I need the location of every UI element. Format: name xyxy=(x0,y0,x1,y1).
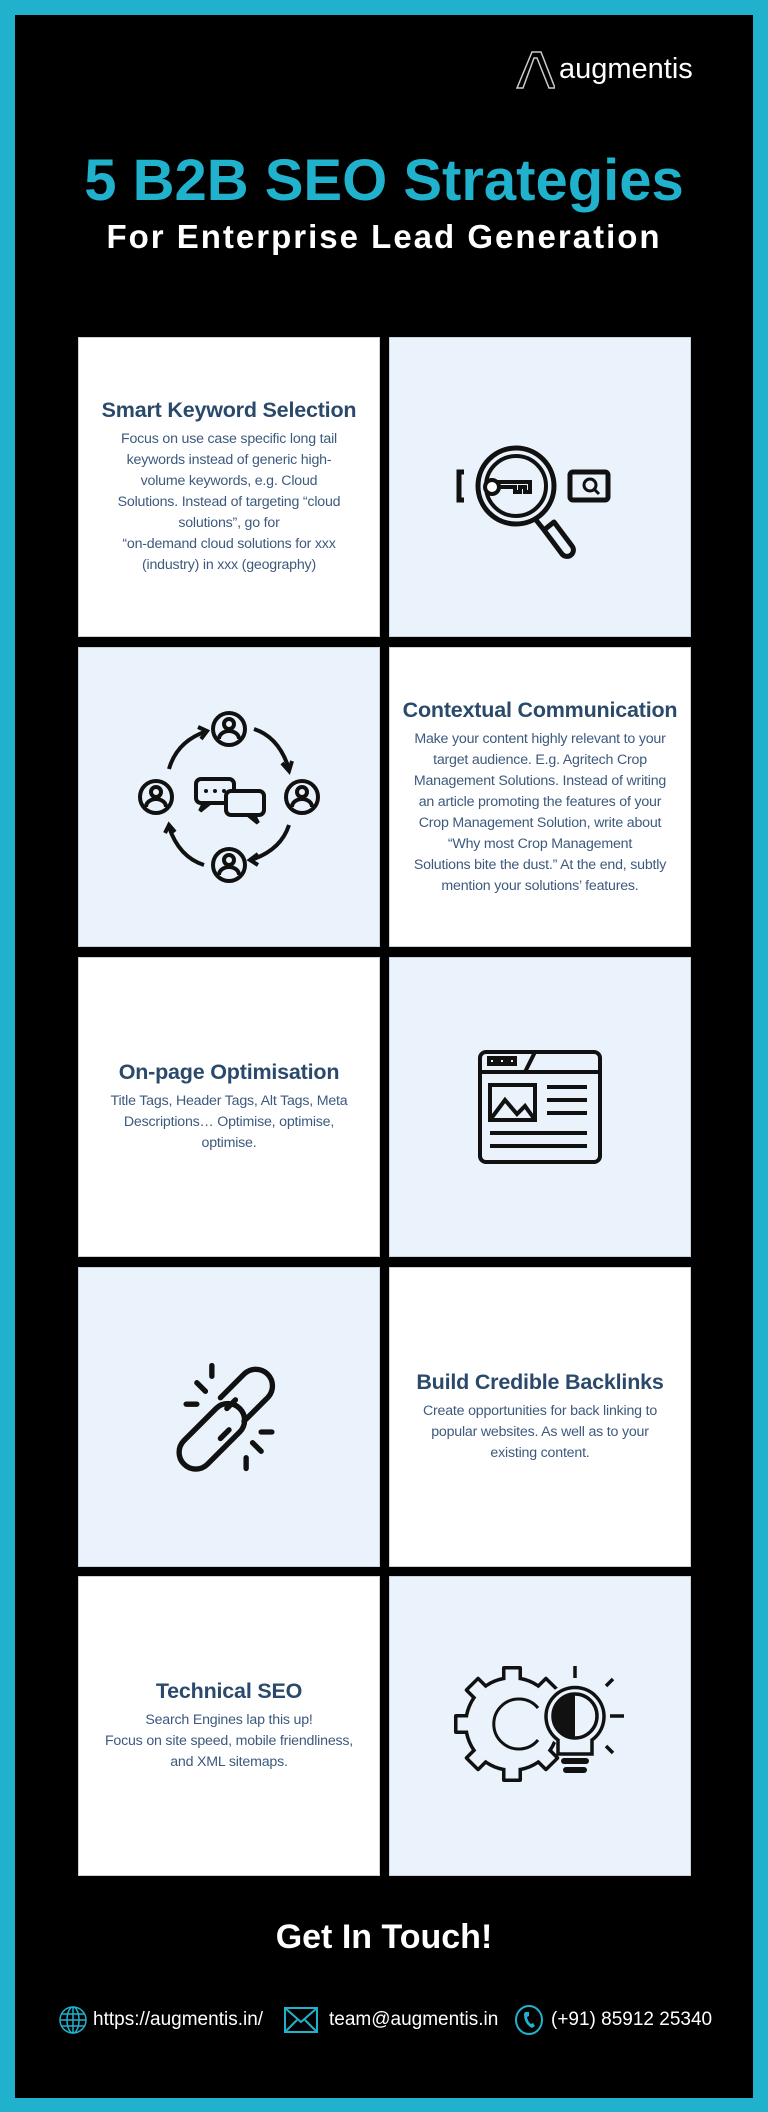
panel: smart keyword selection: solutions”, go for xyxy=(178,515,280,531)
contact: email xyxy=(284,2007,498,2033)
panel: contextual communication: Solutions bite the dust.” At the end, subtly xyxy=(414,856,666,872)
title: 5 B2B SEO Strategies xyxy=(84,148,684,213)
panel: technical seo: and XML sitemaps. xyxy=(170,1754,288,1770)
logo: augmentis xyxy=(559,53,693,85)
icon: chain link xyxy=(78,1267,380,1567)
panel: contextual communication: an article promoting the features of your xyxy=(419,794,661,810)
contact: website xyxy=(59,2006,263,2034)
panel: build credible backlinks: Create opportunities for back linking to xyxy=(423,1403,657,1419)
panel: technical seo: Technical SEO xyxy=(156,1679,302,1703)
icon: key search xyxy=(389,337,691,637)
logo xyxy=(516,51,693,89)
panel: smart keyword selection: Focus on use case specific long tail xyxy=(121,431,337,447)
panel: build credible backlinks: Build Credible Backlinks xyxy=(416,1370,664,1394)
icon: people communication cycle xyxy=(78,647,380,947)
panel: smart keyword selection: (industry) in xxx (geography) xyxy=(142,557,316,573)
panel: build credible backlinks xyxy=(389,1267,691,1567)
panel: contextual communication: Make your content highly relevant to your xyxy=(414,730,666,746)
subtitle: For Enterprise Lead Generation xyxy=(106,218,662,255)
panel: smart keyword selection: keywords instead of generic high- xyxy=(127,452,331,468)
panel: technical seo xyxy=(78,1576,380,1876)
contact: phone xyxy=(515,2005,712,2035)
panel: technical seo: Focus on site speed, mobile friendliness, xyxy=(105,1733,353,1749)
panel: smart keyword selection: Solutions. Instead of targeting “cloud xyxy=(118,494,340,510)
panel: on-page optimisation: Title Tags, Header Tags, Alt Tags, Meta xyxy=(111,1093,347,1109)
panel: smart keyword selection: Smart Keyword Selection xyxy=(102,398,356,422)
panel: contextual communication: target audience. E.g. Agritech Crop xyxy=(433,752,647,768)
panel: contextual communication: Contextual Communication xyxy=(403,698,677,722)
heading: get in touch: Get In Touch! xyxy=(276,1918,492,1956)
panel: contextual communication: Management Solutions. Instead of writing xyxy=(414,772,666,788)
panel: smart keyword selection: volume keywords, e.g. Cloud xyxy=(141,473,317,489)
icon: web page xyxy=(389,957,691,1257)
contact: email: team@augmentis.in xyxy=(329,2009,498,2030)
panel: technical seo: Search Engines lap this up! xyxy=(145,1712,313,1728)
panel: contextual communication: Crop Management Solution, write about xyxy=(419,814,661,830)
panel: contextual communication xyxy=(389,647,691,947)
panel: on-page optimisation: On-page Optimisation xyxy=(119,1060,339,1084)
panel: on-page optimisation: optimise. xyxy=(202,1135,256,1151)
panel: build credible backlinks: existing content. xyxy=(490,1445,590,1461)
panel: build credible backlinks: popular websites. As well as to your xyxy=(431,1424,649,1440)
panel: on-page optimisation xyxy=(78,957,380,1257)
contact: website: https://augmentis.in/ xyxy=(93,2009,263,2030)
panel: contextual communication: “Why most Crop Management xyxy=(448,836,632,852)
panel: contextual communication: mention your solutions’ features. xyxy=(441,878,639,894)
contact: phone: (+91) 85912 25340 xyxy=(551,2009,712,2030)
panel: smart keyword selection xyxy=(78,337,380,637)
panel: on-page optimisation: Descriptions… Optimise, optimise, xyxy=(124,1114,334,1130)
icon: gear and lightbulb xyxy=(389,1576,691,1876)
panel: smart keyword selection: “on-demand cloud solutions for xxx xyxy=(122,536,336,552)
